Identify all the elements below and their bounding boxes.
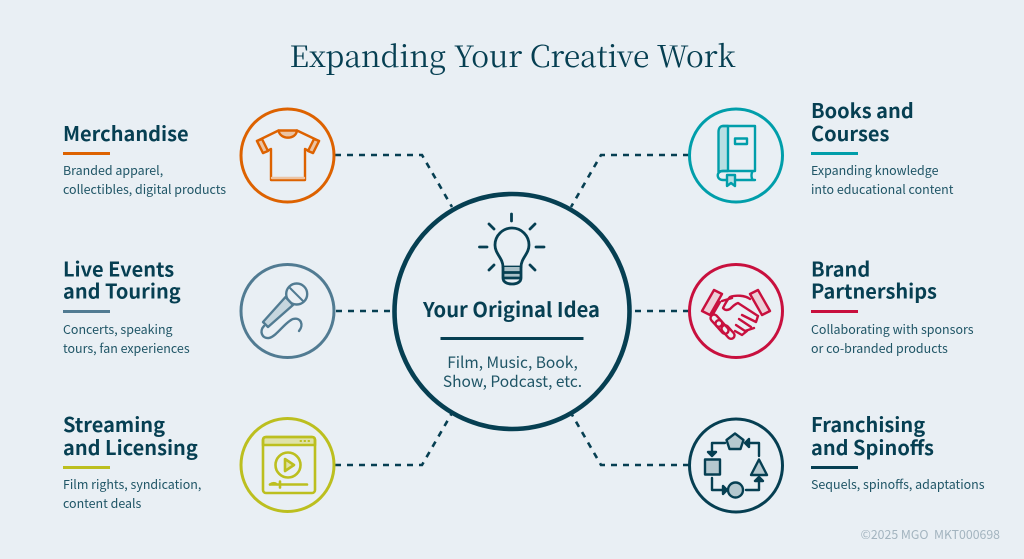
- panel: books: Courses: [811, 118, 889, 147]
- heading: Brand: [811, 254, 870, 282]
- panel: franchising: and Spinoffs: [811, 432, 934, 461]
- panel: franchising: [690, 409, 985, 512]
- panel: books: [690, 95, 954, 202]
- title: Expanding Your Creative Work: [290, 33, 736, 76]
- underline: [63, 152, 110, 155]
- panel: live events: and Touring: [63, 276, 181, 304]
- description: Concerts, speaking: [63, 320, 173, 338]
- panel: streaming: [63, 409, 334, 512]
- icon: microphone: [241, 264, 334, 358]
- panel: live events: tours, fan experiences: [63, 339, 190, 357]
- heading: Franchising: [811, 409, 925, 438]
- description: Sequels, spinoffs, adaptations: [811, 475, 985, 493]
- icon: video player: [241, 418, 334, 512]
- panel: streaming: and Licensing: [63, 432, 198, 461]
- underline: [811, 310, 858, 313]
- icon: book: [690, 109, 782, 202]
- icon: t-shirt: [241, 109, 334, 202]
- heading: Live Events: [63, 254, 174, 282]
- panel: live events: [63, 254, 334, 358]
- panel: merchandise: [63, 109, 334, 202]
- underline: [63, 466, 110, 469]
- central circle: your original idea: Show, Podcast, etc.: [443, 370, 582, 392]
- heading: Books and: [811, 95, 914, 124]
- icon: cycle of shapes: [690, 419, 782, 512]
- heading: your original idea: Your Original Idea: [422, 294, 600, 323]
- panel: brand partnerships: or co-branded products: [811, 339, 948, 357]
- text: examples: Film, Music, Book,: [447, 351, 578, 373]
- underline: [811, 466, 858, 469]
- heading: Merchandise: [63, 118, 189, 147]
- description: Collaborating with sponsors: [811, 320, 974, 338]
- icon: light bulb: [480, 214, 544, 284]
- panel: brand partnerships: [690, 254, 974, 358]
- description: Branded apparel,: [63, 161, 163, 179]
- icon: handshake: [690, 264, 782, 358]
- central circle: your original idea: [394, 194, 630, 429]
- panel: books: into educational content: [811, 180, 954, 198]
- divider: [440, 337, 584, 340]
- heading: Streaming: [63, 409, 165, 438]
- underline: [63, 310, 110, 313]
- description: Expanding knowledge: [811, 161, 939, 179]
- panel: merchandise: collectibles, digital products: [63, 180, 226, 198]
- panel: streaming: content deals: [63, 494, 142, 512]
- panel: brand partnerships: Partnerships: [811, 276, 937, 304]
- dashed connectors: [335, 155, 689, 465]
- description: Film rights, syndication,: [63, 475, 201, 493]
- copyright: ©2025 MGO MKT000698: [861, 525, 1000, 543]
- underline: [811, 152, 858, 155]
